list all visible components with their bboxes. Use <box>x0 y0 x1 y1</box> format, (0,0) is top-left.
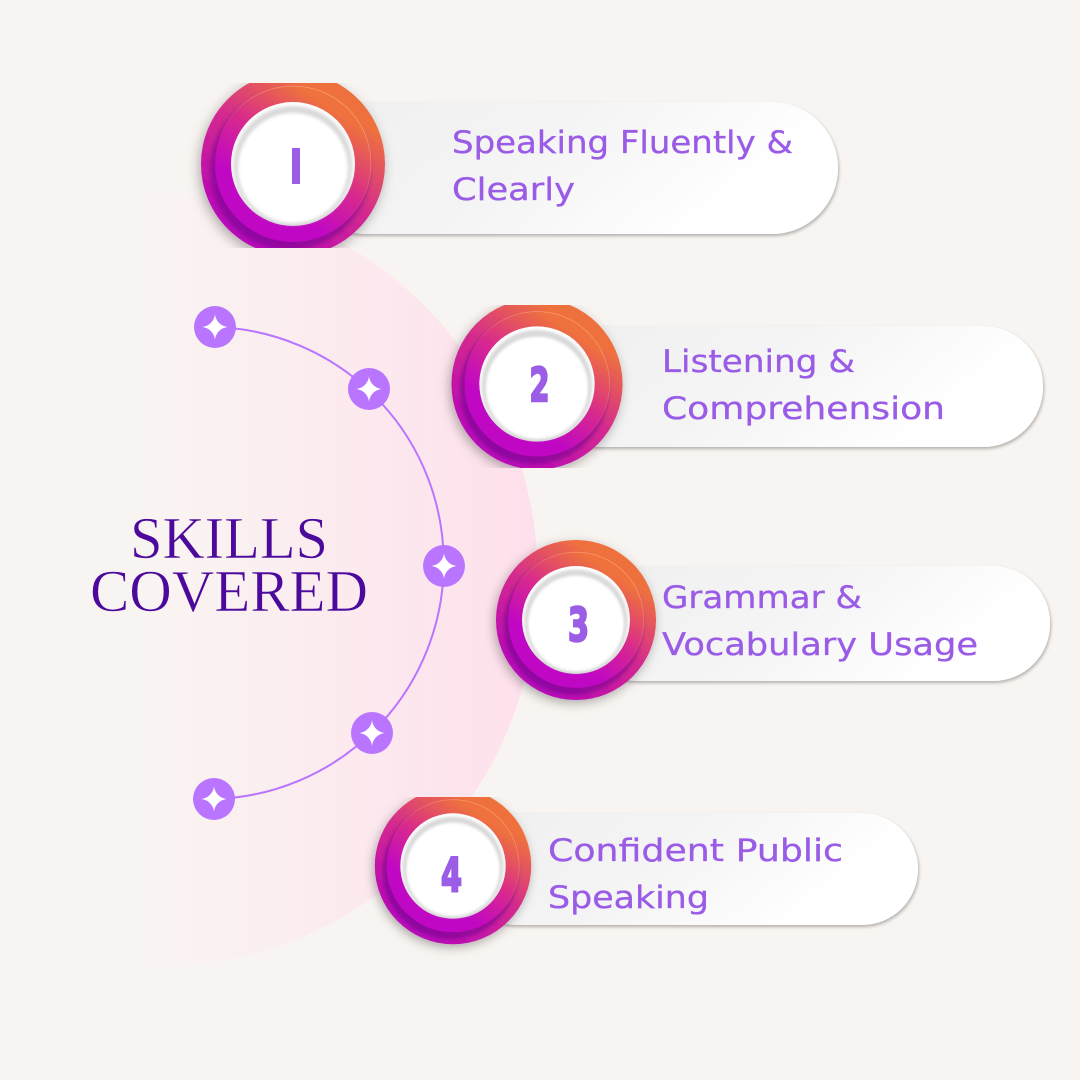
pill 2 <box>540 326 1043 447</box>
title: skills covered: SKILLS <box>130 505 328 571</box>
text: skill 3 <box>662 580 978 663</box>
pill 1 <box>300 102 838 234</box>
number 1: 1 <box>279 138 313 196</box>
badge 3 <box>496 540 656 700</box>
panel: skill 2 <box>451 298 1043 470</box>
icon: star node 3 <box>423 545 465 587</box>
curved connector with star nodes <box>193 306 465 820</box>
text: skill 1 <box>452 125 793 208</box>
title: skills covered <box>90 505 368 624</box>
text: skill 2: Listening & <box>662 344 855 380</box>
text: skill 4: Speaking <box>548 880 709 916</box>
icon: star node 5 <box>193 778 235 820</box>
number 3: 3 <box>568 598 589 652</box>
text: skill 2: Comprehension <box>662 391 945 427</box>
decorative pink semicircle <box>150 192 538 968</box>
text: skill 4: Confident Public <box>548 833 843 869</box>
icon: star node 1 <box>194 306 236 348</box>
text: skill 3: Grammar & <box>662 580 862 616</box>
text: skill 1: Speaking Fluently & <box>452 125 793 161</box>
badge 4 <box>375 788 531 944</box>
number 4: 4 <box>441 848 462 902</box>
icon: star node 4 <box>351 712 393 754</box>
text: skill 4 <box>548 833 843 916</box>
number 1 <box>292 148 300 184</box>
text: skill 1: Clearly <box>452 172 575 208</box>
text: skill 2 <box>662 344 945 427</box>
badge 1 <box>201 72 385 256</box>
panel: skill 3 <box>496 540 1050 700</box>
pill 4 <box>460 813 918 925</box>
icon: star node 2 <box>348 368 390 410</box>
title: skills covered: COVERED <box>90 558 368 624</box>
badge 2 <box>451 298 623 470</box>
pill 3 <box>580 566 1050 681</box>
text: skill 3: Vocabulary Usage <box>662 627 978 663</box>
panel: skill 1 <box>201 72 838 256</box>
panel: skill 4 <box>375 788 918 944</box>
number 2: 2 <box>530 358 550 412</box>
